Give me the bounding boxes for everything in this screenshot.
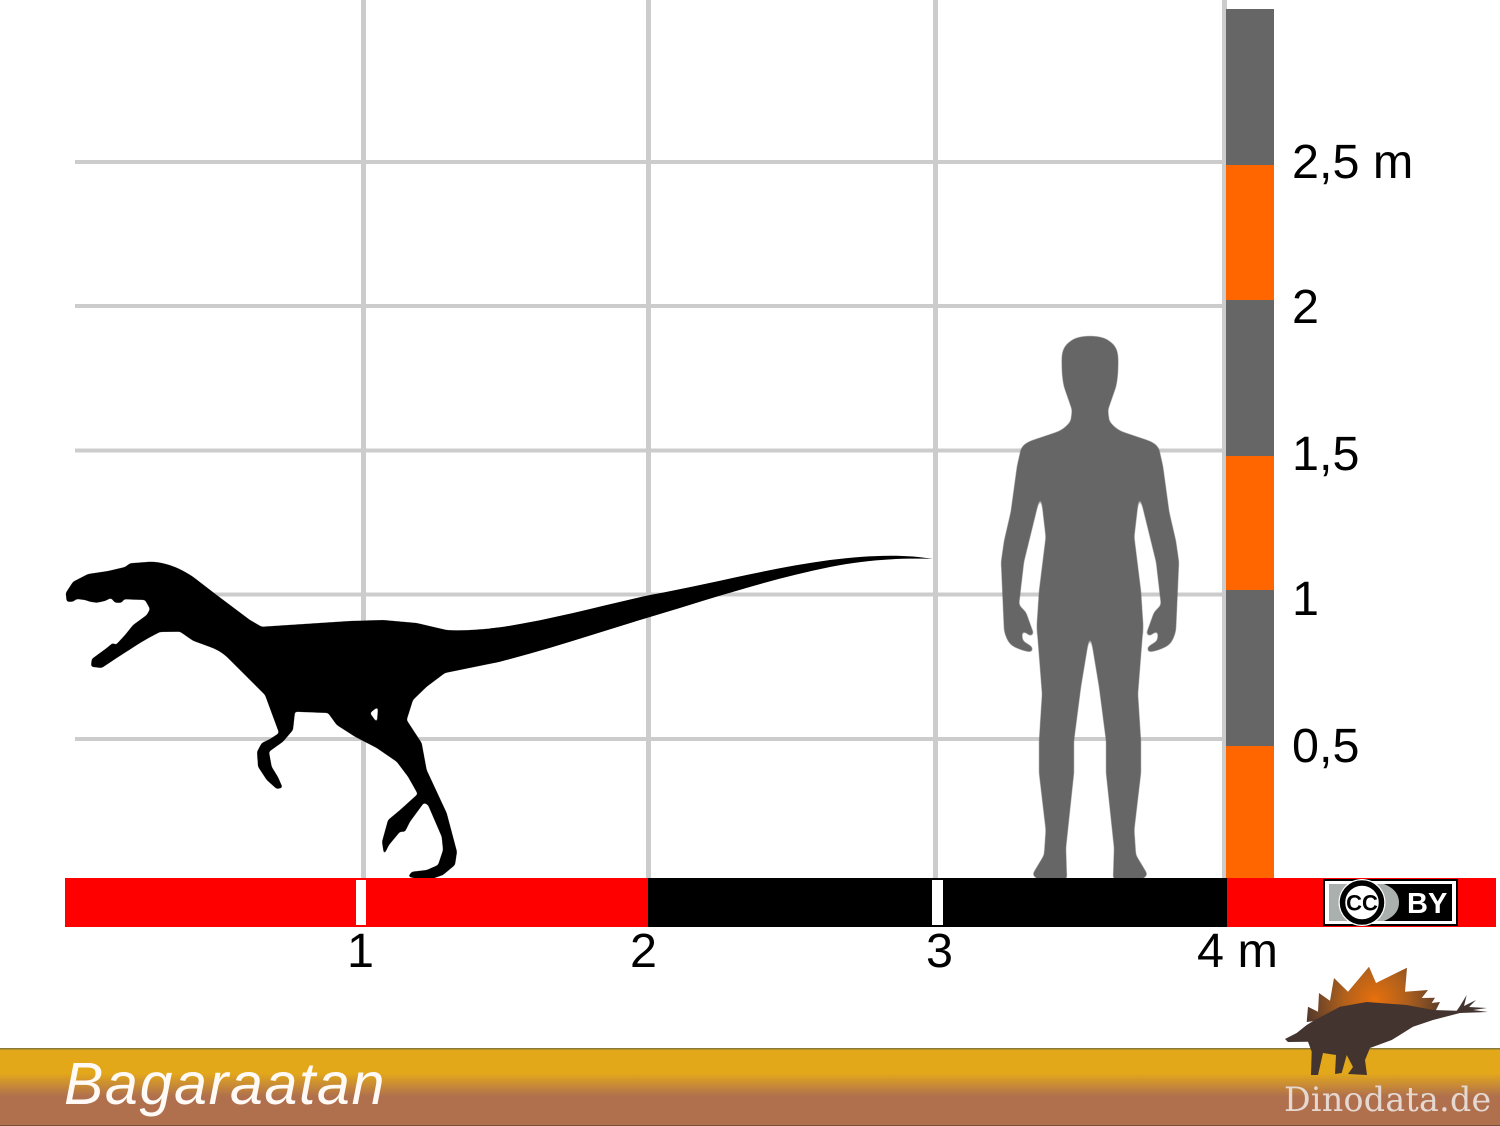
silhouette: human <box>1001 336 1179 880</box>
badge: CC BY licence: BY <box>1407 888 1447 920</box>
length labels: 3 <box>926 924 953 978</box>
badge: CC BY licence <box>1323 879 1458 926</box>
badge: CC BY licence: CC <box>1346 890 1378 916</box>
height labels: 1,5 <box>1292 427 1359 481</box>
grid lines <box>75 0 1227 880</box>
height labels: 0,5 <box>1292 719 1359 773</box>
vertical height scale bar <box>1226 9 1274 879</box>
logo text: Dinodata.de: Dinodata.de <box>1284 1080 1491 1119</box>
height labels: 2 <box>1292 280 1319 334</box>
footer band <box>0 1048 1500 1126</box>
silhouette: Bagaraatan dinosaur <box>66 556 933 881</box>
length labels <box>347 924 1278 978</box>
title: Bagaraatan <box>64 1051 386 1117</box>
logo: stegosaurus <box>1285 967 1488 1075</box>
height labels <box>1292 135 1413 773</box>
height labels: 2,5 m <box>1292 135 1413 189</box>
length labels: 4 m <box>1197 924 1278 978</box>
length labels: 1 <box>347 924 374 978</box>
height labels: 1 <box>1292 572 1319 626</box>
length labels: 2 <box>630 924 657 978</box>
horizontal length scale bar <box>65 878 1496 927</box>
